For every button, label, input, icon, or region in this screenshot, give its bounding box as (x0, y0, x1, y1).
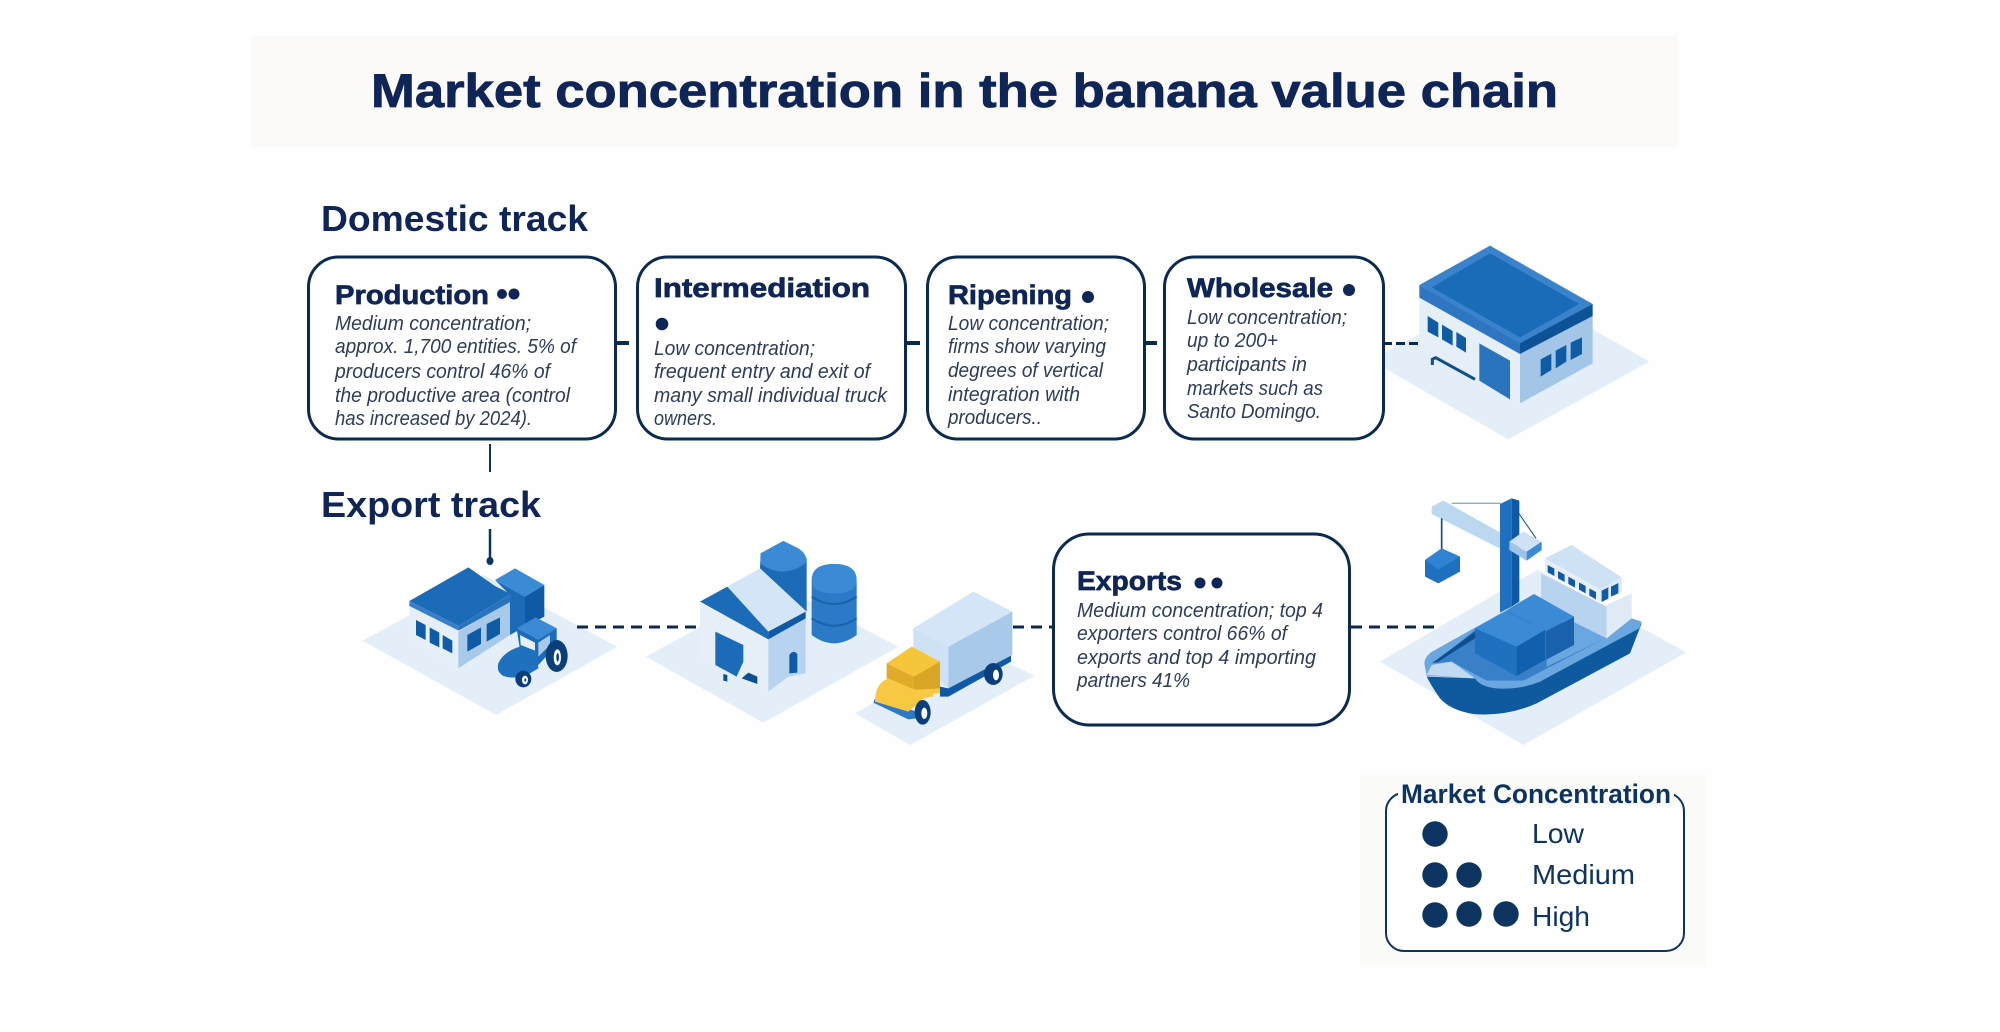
body: ripening: Low concentration; (948, 312, 1109, 335)
rating: medium (497, 288, 520, 300)
title: Market concentration in the banana value chain (371, 64, 1558, 117)
body: production: has increased by 2024). (335, 407, 532, 430)
body: intermediation: Low concentration; (654, 337, 815, 360)
body: production: approx. 1,700 entities. 5% of (335, 335, 578, 358)
heading: wholesale: Wholesale (1187, 273, 1333, 303)
body: production (334, 312, 578, 430)
body: exports: Medium concentration; top 4 (1077, 599, 1323, 622)
body: wholesale (1186, 306, 1347, 423)
heading: export track: Export track (321, 484, 542, 525)
legend: market concentration (1360, 775, 1707, 967)
icon: farm with tractor (363, 567, 617, 715)
connector: production to export track (486, 444, 494, 565)
icon: wholesale market building (1370, 246, 1649, 439)
icon: cargo ship with crane (1380, 498, 1686, 745)
rating: medium (1194, 578, 1222, 588)
body: ripening: firms show varying (948, 335, 1107, 358)
body: wholesale: participants in (1186, 353, 1307, 376)
legend: high: High (1532, 901, 1590, 932)
body: wholesale: up to 200+ (1187, 329, 1278, 352)
legend title: Market Concentration (1401, 779, 1671, 809)
legend: low: Low (1532, 818, 1585, 849)
heading: ripening: Ripening (948, 280, 1072, 310)
body: ripening (947, 312, 1109, 429)
body: wholesale: Santo Domingo. (1187, 400, 1321, 423)
body: intermediation (654, 337, 889, 430)
legend: low (1422, 818, 1585, 849)
body: wholesale: Low concentration; (1187, 306, 1347, 329)
body: production: Medium concentration; (335, 312, 531, 335)
body: exports: exports and top 4 importing (1077, 646, 1317, 669)
connector: domestic track links (616, 341, 1157, 345)
connector: farm to warehouse (577, 626, 700, 628)
icon: storage warehouse with silos (646, 541, 898, 723)
connector: exports to ship (1351, 626, 1434, 628)
body: wholesale: markets such as (1187, 377, 1323, 400)
rating: low (656, 318, 668, 330)
icon: delivery truck (855, 592, 1034, 745)
heading: intermediation: Intermediation (654, 273, 870, 303)
rating: low (1082, 291, 1094, 303)
body: exports (1076, 599, 1323, 692)
legend: medium: Medium (1532, 859, 1635, 890)
connector: truck to exports (1013, 626, 1052, 628)
body: ripening: producers.. (947, 406, 1042, 429)
body: production: producers control 46% of (334, 360, 552, 383)
panel: exports (1054, 534, 1350, 725)
body: ripening: degrees of vertical (948, 359, 1104, 382)
panel: intermediation (638, 257, 906, 439)
body: ripening: integration with (948, 383, 1080, 406)
heading: domestic track: Domestic track (321, 198, 589, 239)
legend: high (1422, 901, 1590, 932)
title (251, 36, 1678, 147)
panel: production (308, 257, 616, 439)
body: production: the productive area (control (335, 384, 571, 407)
body: intermediation: frequent entry and exit of (654, 360, 872, 383)
body: exports: exporters control 66% of (1077, 622, 1289, 645)
panel: ripening (928, 257, 1144, 439)
panel: wholesale (1164, 257, 1384, 439)
legend: medium (1422, 859, 1635, 890)
connector: wholesale to building (1385, 342, 1418, 345)
rating: low (1343, 284, 1355, 296)
body: intermediation: many small individual truck (654, 384, 889, 407)
heading: production: Production (335, 280, 489, 310)
heading: exports: Exports (1077, 566, 1182, 596)
body: intermediation: owners. (654, 407, 717, 430)
body: exports: partners 41% (1076, 669, 1190, 692)
